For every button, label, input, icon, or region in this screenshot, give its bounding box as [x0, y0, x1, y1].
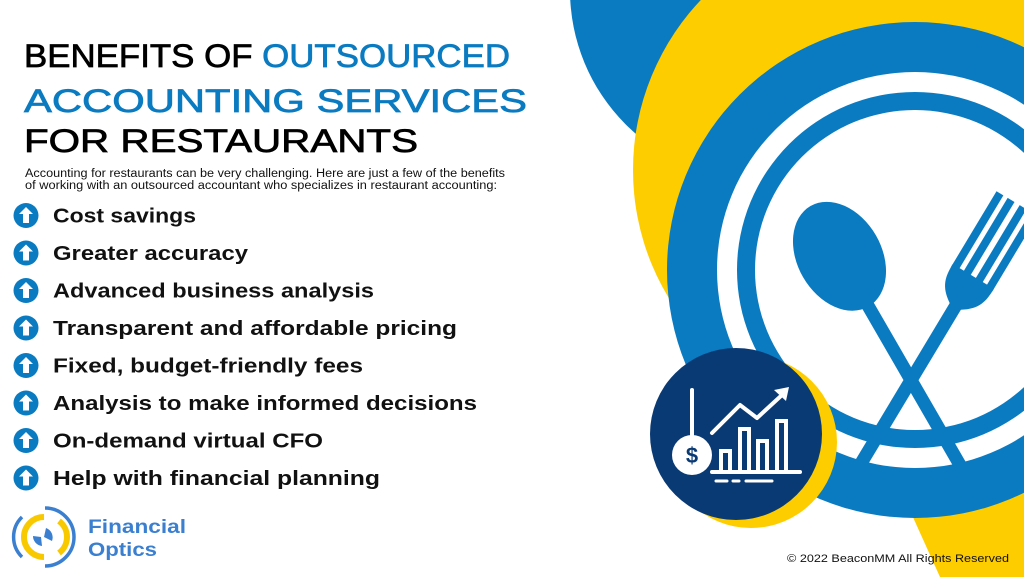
title: FOR RESTAURANTS	[24, 123, 418, 159]
intro text: Accounting for restaurants can be very challenging. Here are just a few of the benefits	[25, 168, 505, 180]
item: transparent pricing: Transparent and affordable pricing	[53, 318, 457, 340]
item: transparent pricing	[14, 316, 457, 340]
logo: Financial Optics: Optics	[88, 540, 157, 561]
logo: Financial Optics: Financial	[88, 517, 186, 538]
item: fixed fees	[14, 353, 363, 378]
benefits list	[14, 203, 477, 490]
plate	[667, 22, 1024, 518]
icon: financial chart badge: $	[686, 443, 698, 468]
item: analysis decisions	[14, 390, 477, 416]
icon: spoon	[774, 185, 996, 486]
item: financial planning	[14, 466, 380, 490]
intro text	[25, 168, 505, 192]
item: analysis decisions: Analysis to make informed decisions	[53, 393, 477, 415]
item: advanced business analysis: Advanced business analysis	[53, 280, 374, 302]
decorative background circles	[570, 0, 1024, 577]
item: cost savings: Cost savings	[53, 206, 196, 228]
item: advanced business analysis	[14, 278, 374, 303]
item: greater accuracy	[14, 240, 249, 266]
item: cost savings	[14, 203, 196, 228]
title	[24, 38, 527, 159]
item: financial planning: Help with financial planning	[53, 468, 380, 490]
copyright: © 2022 BeaconMM All Rights Reserved	[787, 553, 1009, 565]
item: virtual CFO	[14, 428, 323, 453]
icon: financial chart badge	[650, 348, 837, 528]
title: BENEFITS OF OUTSOURCED	[24, 38, 510, 74]
item: virtual CFO: On-demand virtual CFO	[53, 430, 323, 452]
icon: fork	[839, 191, 1024, 477]
logo: Financial Optics	[14, 508, 186, 566]
intro text: of working with an outsourced accountant who specializes in restaurant accounting:	[25, 180, 497, 192]
item: fixed fees: Fixed, budget-friendly fees	[53, 356, 363, 378]
item: greater accuracy: Greater accuracy	[53, 243, 249, 265]
title: ACCOUNTING SERVICES	[24, 83, 527, 119]
